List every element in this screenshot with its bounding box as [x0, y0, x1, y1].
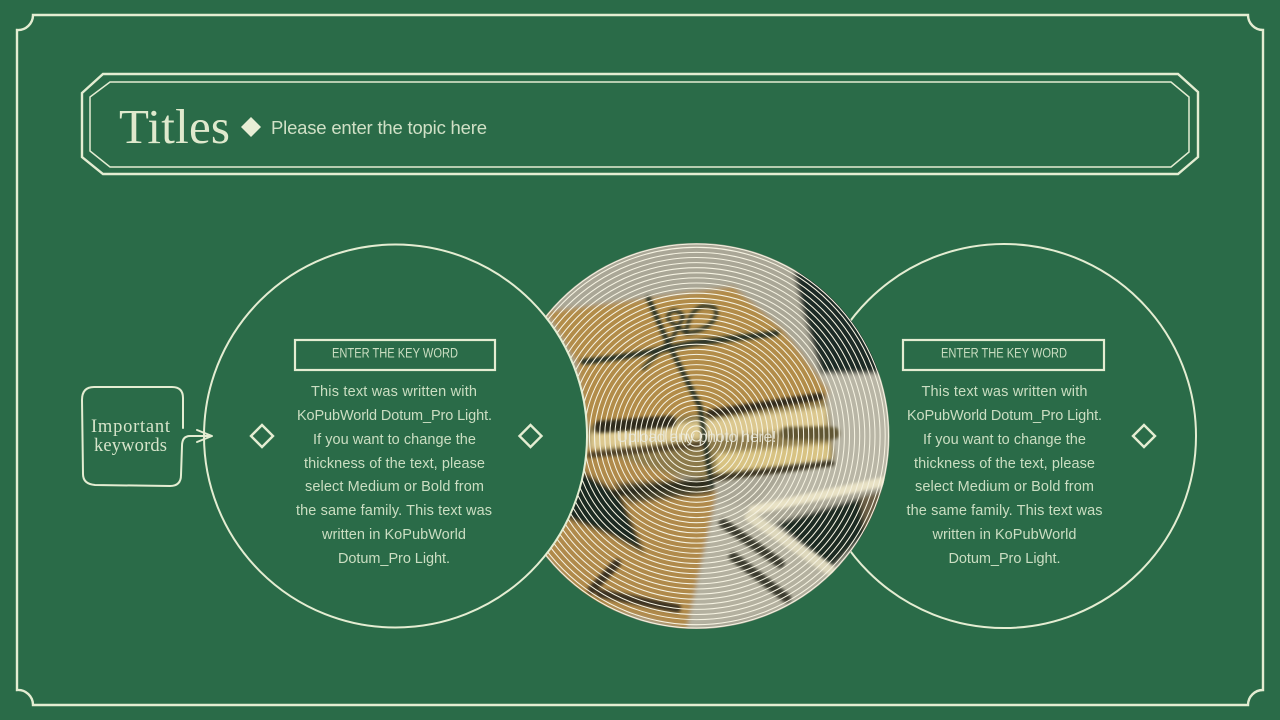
right body text: thickness of the text, please	[914, 456, 1095, 472]
subtitle: Please enter the topic here	[271, 117, 487, 138]
left body text: KoPubWorld Dotum_Pro Light.	[297, 408, 492, 424]
right body text: Dotum_Pro Light.	[948, 551, 1060, 567]
right body text: written in KoPubWorld	[932, 527, 1076, 543]
left circle	[204, 244, 587, 628]
icon: left circle diamond	[251, 425, 273, 447]
photo placeholder artwork	[546, 243, 890, 629]
photo placeholder caption: Upload any photo here!	[616, 429, 776, 446]
right circle	[812, 244, 1196, 628]
left body text: select Medium or Bold from	[305, 479, 484, 495]
photo circle with concentric rings	[546, 243, 890, 629]
callout label	[91, 417, 171, 456]
callout label: Important	[91, 417, 171, 437]
left keyword box	[295, 340, 495, 370]
left body text: If you want to change the	[313, 432, 476, 448]
left body text: the same family. This text was	[296, 503, 492, 519]
left body text: thickness of the text, please	[304, 456, 485, 472]
callout outline with arrow	[82, 387, 212, 486]
right body text: the same family. This text was	[906, 503, 1102, 519]
icon: right circle diamond	[1133, 425, 1155, 447]
concentric ring overlay	[546, 244, 889, 628]
right keyword box: ENTER THE KEY WORD	[941, 344, 1067, 360]
title: Titles	[119, 99, 230, 154]
callout label: keywords	[94, 436, 167, 456]
callout: important keywords	[82, 387, 212, 486]
right body text: KoPubWorld Dotum_Pro Light.	[907, 408, 1102, 424]
left body text: written in KoPubWorld	[321, 527, 466, 543]
left keyword box: ENTER THE KEY WORD	[332, 344, 458, 360]
left body text: This text was written with	[311, 384, 477, 400]
right keyword box	[903, 340, 1104, 370]
right body text	[906, 384, 1102, 567]
right body text: This text was written with	[922, 384, 1088, 400]
right body text: select Medium or Bold from	[915, 479, 1094, 495]
right body text: If you want to change the	[923, 432, 1086, 448]
title banner	[82, 74, 1198, 174]
left body text	[296, 384, 492, 567]
left body text: Dotum_Pro Light.	[338, 551, 450, 567]
icon: title diamond	[241, 117, 261, 137]
icon: left circle right diamond	[520, 425, 542, 447]
